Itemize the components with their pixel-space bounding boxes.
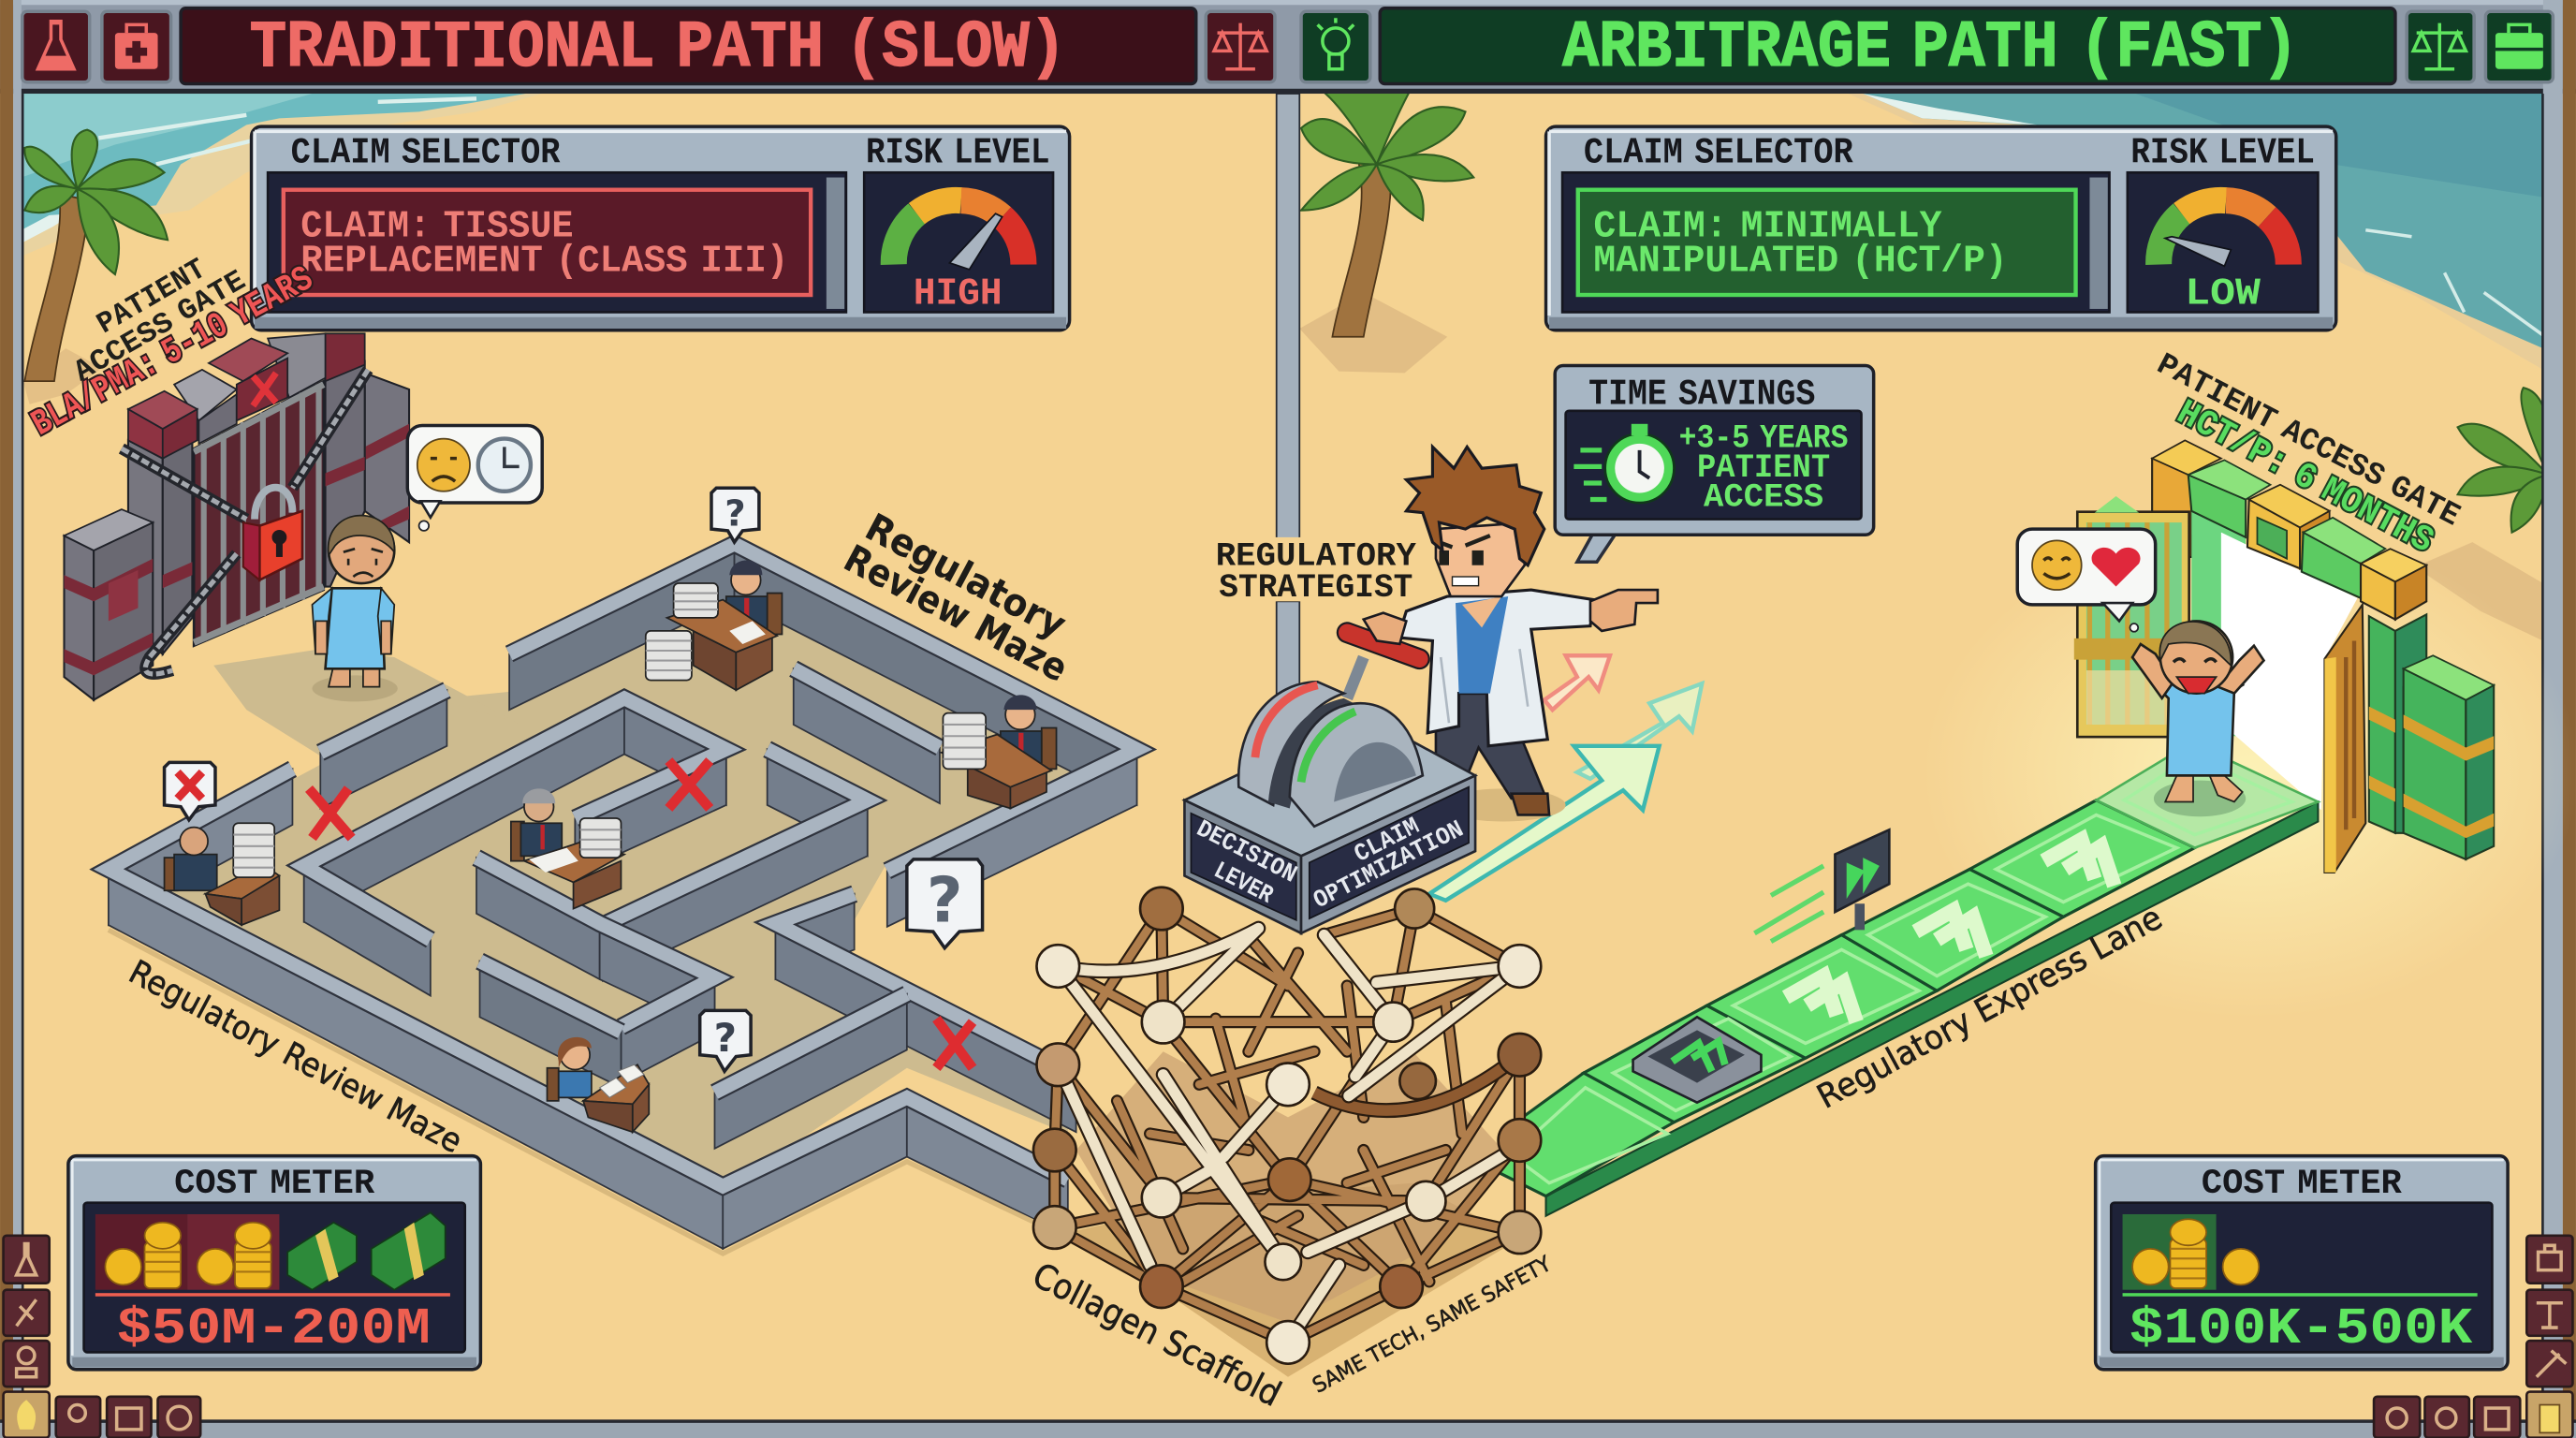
padlock (243, 488, 302, 580)
icon: scales (2407, 11, 2474, 82)
left header (22, 8, 1275, 86)
risk gauge: high: HIGH (914, 273, 1003, 316)
maze floor (124, 550, 1134, 1191)
claim box: REPLACEMENT (CLASS III) (300, 241, 788, 284)
hand pointing (1590, 590, 1658, 631)
label: regulatory review maze upper: Regulatory (858, 505, 1073, 647)
palm tree far right (2415, 388, 2549, 640)
icon: happy face (2032, 540, 2082, 590)
coins and cash (105, 1212, 446, 1290)
label: regulatory review maze upper: Review Maze (837, 536, 1075, 691)
icon: scales (1206, 11, 1275, 82)
icon: x bubble (165, 762, 215, 820)
claim box (284, 190, 811, 295)
claim selector panel: left (252, 126, 1070, 330)
cost meter: right: COST METER (2202, 1165, 2403, 1204)
lever arm and red handle (1347, 613, 1419, 659)
time savings panel: TIME SAVINGS (1588, 374, 1815, 416)
regulatory review maze walls (109, 544, 1137, 1254)
lever plate: decision lever (1191, 814, 1301, 920)
risk gauge: high (864, 172, 1053, 316)
regulatory strategist label: STRATEGIST (1219, 569, 1412, 607)
ocean and shoreline: right panel (1848, 94, 2543, 370)
dome front (1290, 703, 1423, 827)
lever plate: claim optimization: CLAIM (1350, 813, 1424, 869)
time savings panel: +3-5 YEARS (1679, 419, 1848, 457)
title banner: traditional path: TRADITIONAL PATH (SLOW) (250, 12, 1066, 86)
icon: question bubble right (907, 859, 983, 948)
clerk at desk: top (646, 560, 782, 690)
corner icons: left (4, 1236, 200, 1438)
regulatory strategist character (1398, 447, 1658, 814)
regulatory express lane (1500, 742, 2318, 1216)
icon: briefcase (2485, 11, 2553, 82)
trousers and shoes (1436, 690, 1549, 814)
time savings panel: ACCESS (1704, 479, 1823, 517)
lever plate: claim optimization: OPTIMIZATION (1309, 815, 1468, 915)
tall left column (128, 391, 198, 654)
patient access gate: open (2076, 440, 2494, 873)
clerk at desk: left (165, 823, 279, 925)
label: regulatory express lane: Regulatory Express Lane (1811, 899, 2169, 1117)
low left block (65, 509, 153, 700)
claim selector panel: right: RISK LEVEL (2130, 133, 2315, 174)
spiky hair (1406, 447, 1544, 565)
lever plate: decision lever: LEVER (1209, 857, 1278, 910)
coins (2132, 1219, 2259, 1288)
icon: question bubble right: ? (927, 864, 963, 937)
gate label: patient access gate (25, 254, 320, 446)
cost meter: left (68, 1156, 480, 1370)
regulatory strategist label (1212, 537, 1419, 607)
top blocks (174, 339, 287, 444)
gate label: patient access gate: BLA/PMA: 5-10 YEARS (25, 258, 320, 446)
icon: question bubble lower (700, 1010, 751, 1071)
claim box (1578, 190, 2076, 295)
corner icons: right (2374, 1236, 2572, 1438)
device on lane (1633, 1017, 1761, 1103)
lever plate: decision lever: DECISION (1192, 814, 1301, 889)
cost meter: left: $50M-200M (117, 1301, 431, 1358)
chains (122, 370, 368, 674)
ocean and shoreline: left panel (22, 94, 542, 257)
time savings panel: PATIENT (1697, 449, 1830, 487)
claim box: MANIPULATED (HCT/P) (1593, 241, 2008, 284)
regulatory strategist label: REGULATORY (1216, 538, 1416, 576)
patient access gate: locked (65, 333, 409, 700)
cost meter: right (2096, 1156, 2508, 1370)
clerk at desk: right (942, 695, 1057, 808)
clerk at desk: bottom (547, 1037, 649, 1132)
sad patient (313, 516, 398, 701)
back right block (268, 333, 409, 587)
icon: clock (478, 439, 531, 492)
label: collagen scaffold: Collagen Scaffold (1026, 1255, 1287, 1415)
speech bubble: sad and clock (407, 426, 542, 531)
icon: heart (2092, 548, 2141, 587)
label: same tech, same safety: SAME TECH, SAME SAFETY (1309, 1252, 1555, 1399)
palm tree right (1299, 85, 1473, 373)
icon: stopwatch (1573, 424, 1674, 503)
label: regulatory review maze lower: Regulatory Review Maze (123, 953, 468, 1161)
claim box: CLAIM: TISSUE (300, 206, 574, 249)
title banner: arbitrage path: ARBITRAGE PATH (FAST) (1562, 12, 2298, 86)
speed lines (1754, 866, 1823, 942)
player shadow (1441, 788, 1566, 822)
face (1436, 522, 1528, 596)
risk gauge: low (2128, 172, 2318, 316)
icon: medical case (102, 11, 171, 82)
clerk at desk: centre (511, 788, 624, 909)
momentum arrows (1429, 655, 1702, 901)
icon: light bulb (1301, 11, 1370, 82)
lab coat (1398, 590, 1593, 746)
gate label: patient access gate: ACCESS GATE (69, 265, 252, 389)
cost meter: right: $100K-500K (2130, 1301, 2473, 1358)
claim selector panel: left: CLAIM SELECTOR (291, 133, 561, 174)
cheering patient (2132, 621, 2263, 816)
time savings panel (1555, 365, 1874, 562)
risk gauge: low: LOW (2185, 273, 2261, 316)
path shadow near patient gate (213, 649, 518, 756)
claim selector panel: left: RISK LEVEL (866, 133, 1050, 174)
claim selector panel: right: CLAIM SELECTOR (1584, 133, 1853, 174)
bars (194, 381, 324, 646)
dome rear (1238, 682, 1344, 805)
decision lever machine (1184, 613, 1475, 933)
right header (1301, 8, 2553, 86)
gate light glow (1922, 526, 2576, 1019)
tan struts (1055, 909, 1519, 1343)
gate label: patient access gate: PATIENT (92, 254, 212, 342)
speech bubble: happy and heart (2017, 529, 2156, 632)
express sign (1835, 829, 1889, 930)
gate label: patient access gate: PATIENT ACCESS GATE (2151, 347, 2466, 535)
lever shaft (1347, 657, 1364, 698)
claim box: CLAIM: MINIMALLY (1593, 206, 1942, 249)
cream struts (1058, 929, 1519, 1343)
icon: question bubble top (711, 488, 759, 542)
claim selector panel: right (1546, 126, 2336, 330)
icon: flask (22, 11, 90, 82)
gate label: patient access gate: HCT/P: 6 MONTHS (2170, 392, 2440, 563)
collagen scaffold (1033, 888, 1541, 1377)
icon: question bubble lower: ? (714, 1015, 737, 1061)
palm tree left (23, 130, 168, 404)
red x marks (309, 761, 973, 1068)
cost meter: left: COST METER (174, 1165, 375, 1204)
icon: sad face (417, 439, 470, 492)
icon: question bubble top: ? (724, 493, 746, 536)
collagen nodes (1033, 888, 1541, 1364)
